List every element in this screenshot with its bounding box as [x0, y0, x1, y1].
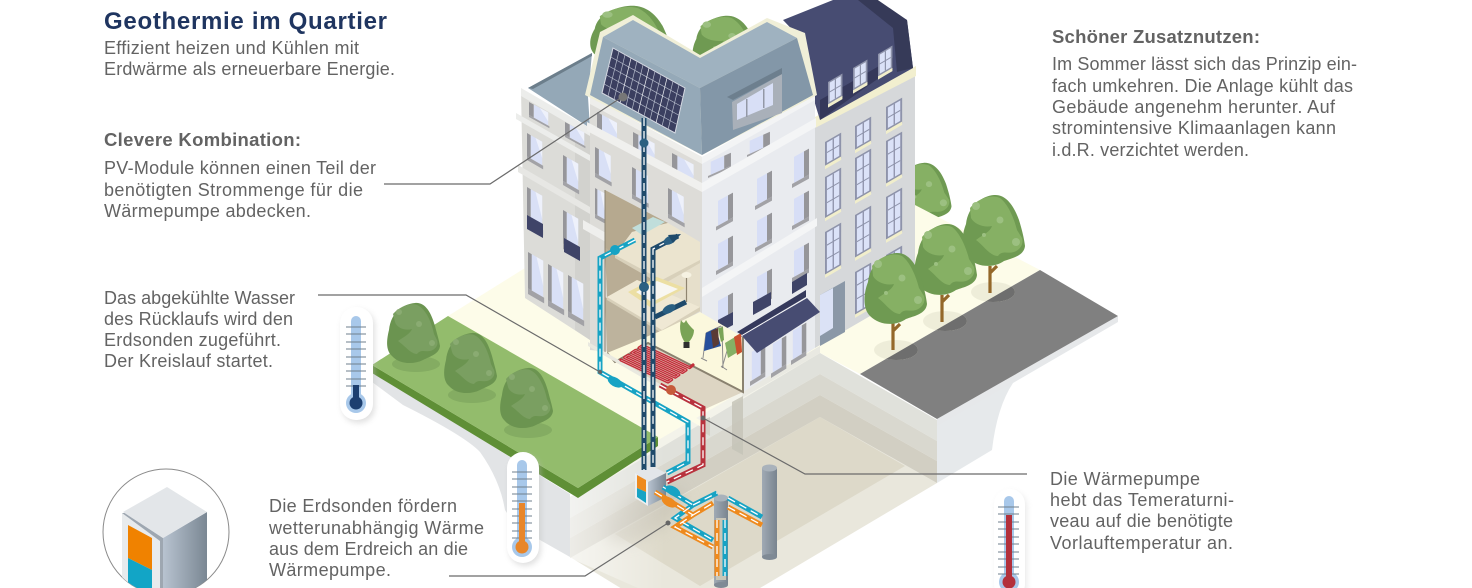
text block: Wärmepumpe: Vorlauftemperatur an. [1050, 533, 1233, 553]
text block: Schöner Zusatznutzen [1052, 26, 1357, 160]
text block: Clevere Kombination: benötigten Strommenge für die [104, 180, 363, 200]
text block: Erdsonden: wetterunabhängig Wärme [268, 518, 484, 538]
thermometer: warm [507, 452, 541, 566]
left foundation block [372, 372, 570, 557]
text block: Schöner Zusatznutzen: i.d.R. verzichtet werden. [1052, 140, 1249, 160]
text block: Schöner Zusatznutzen: fach umkehren. Die Anlage kühlt das [1052, 76, 1353, 96]
heat pump detail circle [103, 469, 229, 588]
upper tan wall [605, 190, 668, 255]
text block: Schöner Zusatznutzen: Schöner Zusatznutzen: [1052, 26, 1260, 47]
text block: Clevere Kombination: PV-Module können einen Teil der [104, 158, 376, 178]
mansard roof [585, 15, 817, 155]
text block: Rücklauf [104, 288, 295, 371]
ground floor [607, 312, 743, 392]
text block: Wärmepumpe: Die Wärmepumpe [1050, 469, 1200, 489]
ground plate [372, 205, 1040, 497]
text block: Erdsonden: Die Erdsonden fördern [269, 496, 457, 516]
text block: Wärmepumpe: hebt das Temeraturni- [1050, 490, 1234, 510]
ground probes [714, 464, 777, 588]
ground pipe circuit [655, 483, 762, 576]
leader lines [318, 92, 1027, 576]
trees along the road [864, 195, 1025, 360]
annex navy roof [783, 0, 913, 120]
lower tan wall [605, 297, 663, 354]
solar panels [602, 48, 685, 133]
title block: Effizient heizen und Kühlen mit [104, 38, 359, 58]
title block [104, 8, 395, 79]
excavation pit [570, 346, 937, 588]
middle slab with bed [607, 272, 700, 333]
bushes on grass [387, 303, 553, 438]
heat pump unit [635, 465, 666, 506]
grass [372, 316, 658, 498]
trees behind the building [590, 6, 952, 223]
thermometer: cold [340, 307, 375, 423]
main building facade [583, 93, 817, 392]
text block: Schöner Zusatznutzen: Im Sommer lässt sich das Prinzip ein- [1052, 54, 1357, 74]
middle storey walls [605, 248, 700, 312]
road [860, 270, 1118, 426]
left wing of building [516, 53, 592, 340]
right annex building [815, 66, 916, 348]
text block: Clevere Kombination: Clevere Kombination: [104, 129, 301, 150]
text block: Erdsonden [268, 496, 484, 580]
text block: Wärmepumpe: veau auf die benötigte [1050, 511, 1233, 531]
plant [680, 320, 694, 348]
text block: Rücklauf: Der Kreislauf startet. [104, 351, 273, 371]
text block: Rücklauf: Das abgekühlte Wasser [104, 288, 295, 308]
awning and shop windows [737, 290, 820, 386]
thermometer: hot [994, 489, 1027, 588]
text block: Clevere Kombination [104, 129, 376, 221]
text block: Wärmepumpe [1050, 469, 1234, 553]
title block: Geothermie im Quartier [104, 8, 387, 35]
right foundation block [937, 322, 1118, 483]
text block: Clevere Kombination: Wärmepumpe abdecken. [104, 201, 311, 221]
text block: Schöner Zusatznutzen: Gebäude angenehm herunter. Auf [1052, 97, 1336, 117]
cut-away rooms [588, 190, 743, 428]
upper slab [615, 217, 700, 285]
heating circuit pipes [600, 118, 703, 482]
text block: Rücklauf: des Rücklaufs wird den [104, 309, 293, 329]
text block: Schöner Zusatznutzen: stromintensive Klimaanlagen kann [1052, 118, 1336, 138]
clothes rack [701, 326, 742, 370]
title block: Erdwärme als erneuerbare Energie. [104, 59, 395, 79]
text block: Erdsonden: aus dem Erdreich an die [269, 539, 468, 559]
floor heating coils [621, 346, 693, 382]
text block: Erdsonden: Wärmepumpe. [269, 560, 391, 580]
dormer window [727, 68, 782, 130]
text block: Rücklauf: Erdsonden zugeführt. [104, 330, 281, 350]
